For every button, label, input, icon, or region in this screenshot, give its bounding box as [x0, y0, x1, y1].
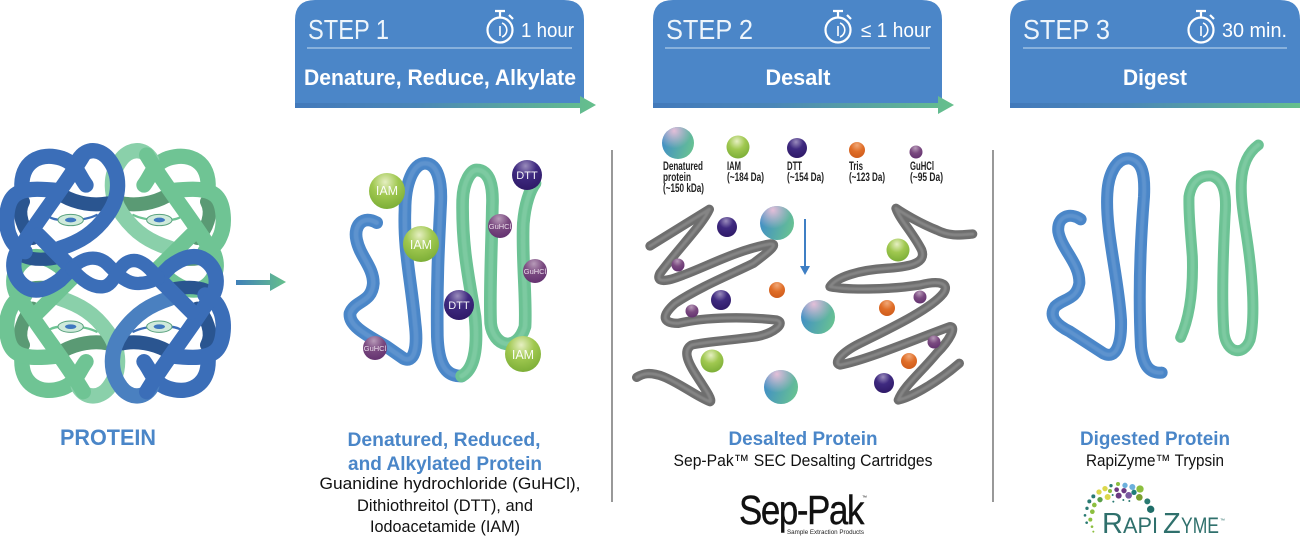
caption: step 3: [1080, 428, 1230, 470]
caption: step 3: RapiZyme™ Trypsin: [1086, 452, 1224, 470]
step 2 label: STEP 2: [666, 14, 753, 45]
reagent: GuHCl: [488, 214, 512, 238]
step 2 title: Desalt: [766, 65, 831, 90]
caption: step 2: Desalted Protein: [728, 428, 878, 450]
step 1 title: Denature, Reduce, Alkylate: [304, 65, 576, 90]
logo: RapiZyme: ™: [1220, 518, 1225, 524]
illustration: denatured protein with reagents: [350, 160, 547, 376]
reagent: IAM: [505, 336, 541, 372]
caption: step 3: Digested Protein: [1080, 428, 1230, 450]
reagent: GuHCl: GuHCl: [489, 222, 512, 231]
icon: stopwatch: [488, 11, 513, 42]
illustration: digested protein: [1053, 145, 1258, 373]
reagent: IAM: IAM: [512, 348, 534, 362]
caption: step 1: Guanidine hydrochloride (GuHCl),: [320, 475, 580, 493]
legend item: GuHCl: [910, 146, 943, 184]
caption: step 1: Denatured, Reduced,: [348, 429, 540, 451]
illustration: folded protein: [7, 151, 223, 396]
legend item: DTT: DTT: [787, 161, 802, 173]
legend item: IAM: IAM: [727, 161, 741, 173]
step 1 label: STEP 1: [308, 14, 389, 45]
arrow: step 1: [295, 96, 596, 114]
legend item: Tris: [849, 142, 885, 184]
reagent: DTT: DTT: [448, 300, 470, 312]
legend item: Tris: Tris: [849, 161, 863, 173]
heading: protein: PROTEIN: [60, 425, 156, 450]
legend item: denatured protein: [662, 127, 704, 195]
legend item: denatured protein: protein: [663, 172, 691, 184]
legend item: Tris: (~123 Da): [849, 172, 885, 184]
illustration: size-exclusion desalting: [637, 206, 973, 404]
resin bead right: [830, 208, 973, 400]
reagent: IAM: [403, 226, 439, 262]
step 3 label: STEP 3: [1023, 14, 1110, 45]
arrow: step 2: [653, 96, 954, 114]
caption: step 1: Dithiothreitol (DTT), and: [357, 497, 533, 515]
legend item: denatured protein: (~150 kDa): [663, 183, 704, 195]
legend item: IAM: (~184 Da): [727, 172, 764, 184]
logo: Sep-Pak: ™: [862, 495, 867, 501]
reagent: GuHCl: GuHCl: [524, 267, 547, 276]
legend: molecule sizes: [662, 127, 943, 195]
panel: step 2 header: [653, 0, 954, 114]
reagent: IAM: IAM: [376, 184, 398, 198]
panel: step 1 header: [295, 0, 596, 114]
caption: step 2: [674, 428, 932, 470]
caption: step 1: [320, 429, 580, 536]
arrow: flow direction: [800, 219, 810, 275]
reagent: DTT: [444, 290, 474, 320]
reagent: IAM: IAM: [410, 238, 432, 252]
step 3 title: Digest: [1123, 65, 1188, 90]
reagent: GuHCl: [363, 336, 387, 360]
logo: Sep-Pak: Sample Extraction Products: [787, 529, 865, 536]
molecules: [672, 206, 940, 404]
reagent: GuHCl: [523, 259, 547, 283]
reagent: IAM: [369, 173, 405, 209]
legend item: DTT: (~154 Da): [787, 172, 824, 184]
reagent: DTT: [512, 160, 542, 190]
duration: ≤ 1 hour: [861, 20, 931, 42]
duration: 1 hour: [521, 20, 574, 42]
bar: step 3: [1010, 103, 1300, 108]
legend item: denatured protein: Denatured: [663, 161, 703, 173]
logo: Sep-Pak: Sep-Pak: [739, 488, 865, 534]
duration: 30 min.: [1222, 20, 1287, 42]
caption: step 2: Sep-Pak™ SEC Desalting Cartridges: [674, 452, 932, 470]
logo: RapiZyme: [1084, 482, 1225, 537]
caption: step 1: and Alkylated Protein: [348, 453, 542, 475]
arrow: protein to step 1: [236, 273, 286, 291]
legend item: GuHCl: GuHCl: [910, 161, 934, 173]
legend item: IAM: [726, 136, 764, 184]
caption: step 1: Iodoacetamide (IAM): [370, 518, 520, 536]
reagent: DTT: DTT: [516, 170, 538, 182]
logo dots: [1084, 482, 1154, 533]
panel: step 3 header: [1010, 0, 1300, 108]
legend item: DTT: [787, 138, 824, 184]
icon: stopwatch: [1188, 11, 1214, 42]
legend item: GuHCl: (~95 Da): [910, 172, 943, 184]
icon: stopwatch: [826, 11, 851, 42]
reagent: GuHCl: GuHCl: [364, 344, 387, 353]
strand: denatured protein: [350, 163, 535, 376]
resin bead left: [637, 209, 780, 402]
